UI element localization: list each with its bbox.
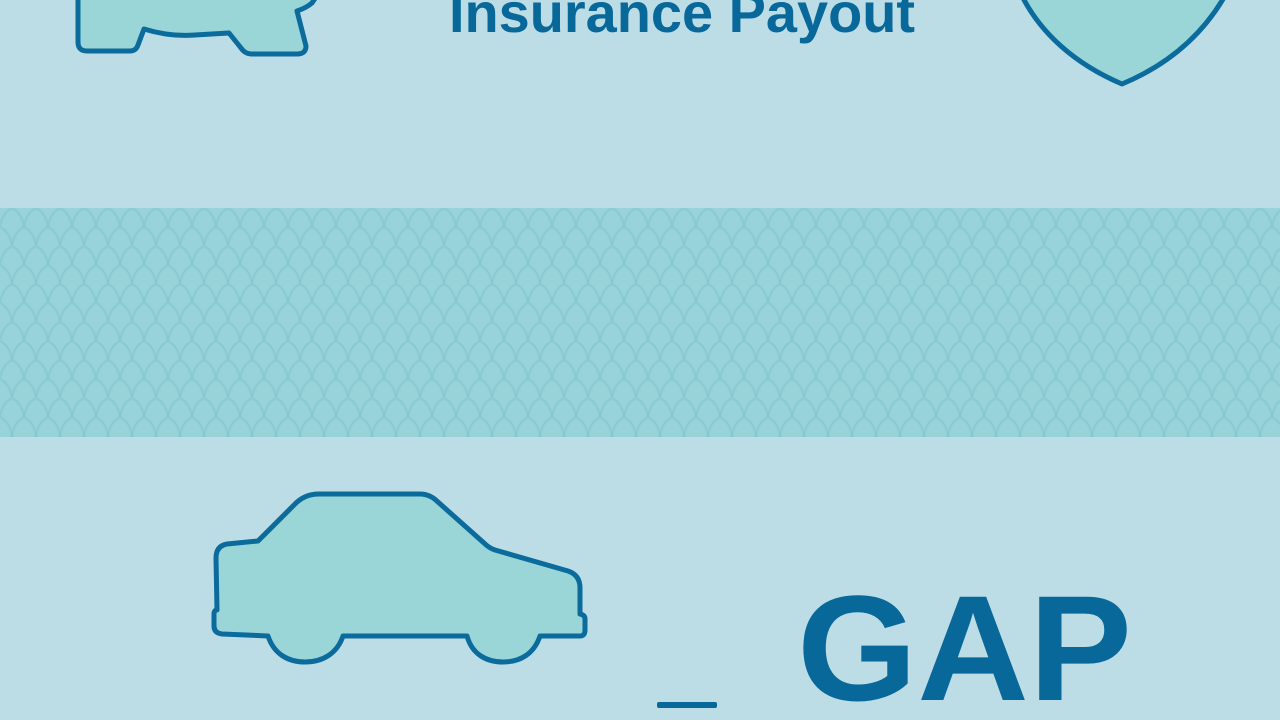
- scale-patterned band: [0, 208, 1280, 437]
- icon: cropped car at top left: [78, 0, 318, 54]
- dash mark: [657, 702, 717, 708]
- icon: car outline: [214, 494, 585, 662]
- icon: cropped shield at top right: [1021, 0, 1226, 84]
